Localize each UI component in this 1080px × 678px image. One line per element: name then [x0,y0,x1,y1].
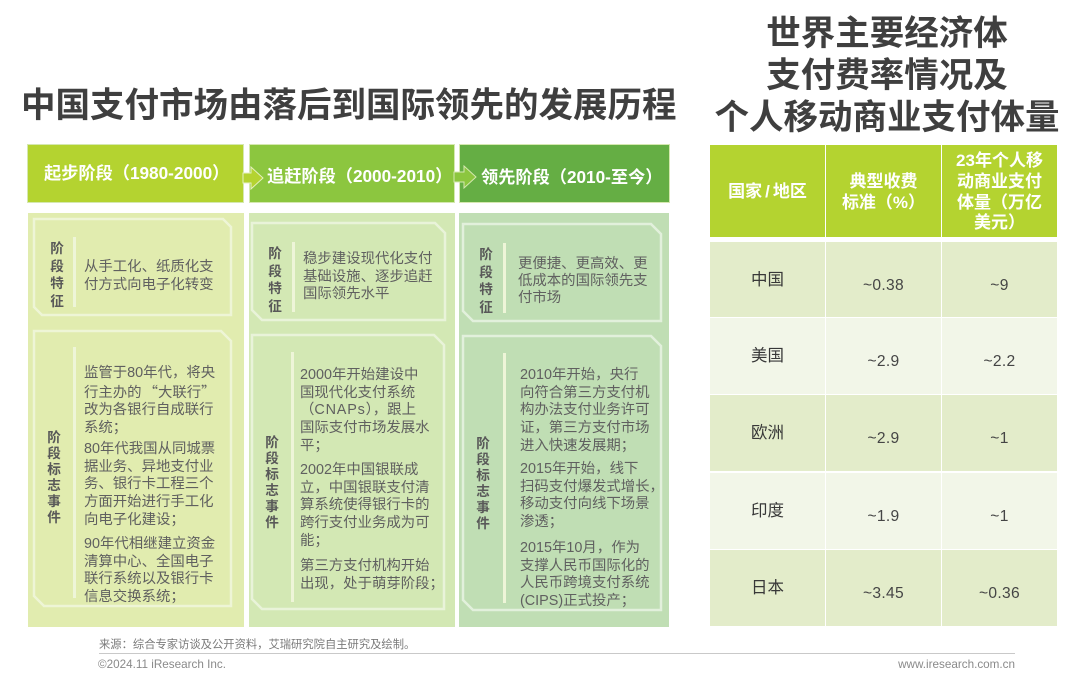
stage 3 event text: 进入快速发展期； [520,438,635,454]
copyright: ©2024.11 iResearch Inc. [98,658,226,671]
header: stage 2: 追赶阶段（2000-2010） [267,166,452,186]
stage 1 event text 2: 方面开始进行手工化 [84,494,214,510]
stage 2 event text: （CNAPs），跟上 [300,402,416,418]
table header: country [710,145,825,237]
panel: stage 2 body [249,213,455,627]
stage 2 event text: 国现代化支付系统 [300,385,415,401]
source note: 来源：综合专家访谈及公开资料，艾瑞研究院自主研究及绘制。 [99,639,415,651]
row: Japan: ~3.45 [863,584,904,602]
website: www.iresearch.com.cn [898,658,1015,671]
stage 3 event text 3: 支撑人民币国际化的 [520,558,650,574]
footer rule [99,653,1015,654]
divider [502,353,506,603]
table header: volume [942,145,1057,237]
stage 1 feature label: 阶段特征 [50,241,64,308]
arrow: stage 2 to 3 [454,165,477,189]
stage 2 feature text [303,250,433,302]
stage 1 event text: 改为各银行自成联行 [84,402,214,418]
arrow: stage 1 to 2 [242,166,264,190]
table header: volume: 美元） [974,213,1025,232]
stage 3 event text 3: 2015年10月，作为 [520,540,640,556]
row: Europe: ~1 [990,430,1009,446]
row: India: ~1 [990,508,1009,524]
header: stage 1 [27,144,244,203]
title: left heading: 中国支付市场由落后到国际领先的发展历程 [21,87,676,125]
stage 1 event text 3 [84,536,215,605]
stage 2 feature text: 国际领先水平 [303,286,389,302]
stage 1 event text 2: 80年代我国从同城票 [84,441,215,457]
stage 2 feature label: 阶段特征 [268,246,282,314]
stage 2 event text 2: 2002年中国银联成 [300,462,418,478]
stage 3 feature label: 阶段特征 [479,247,493,314]
stage 2 event text 2: 能； [300,533,329,549]
stage 1 event text 2 [84,440,215,528]
stage 3 event label: 阶段标志事件 [476,436,490,531]
header: stage 2 [249,144,455,203]
stage 3 feature text: 低成本的国际领先支 [518,273,648,289]
row: China: ~9 [990,276,1009,294]
row: China: ~0.38 [863,276,904,294]
header: stage 3: 领先阶段（2010-至今） [481,167,662,187]
title: right heading [714,15,1060,137]
stage 1 event text: 行主办的“大联行” [84,381,216,402]
stage 2 event text 2 [300,462,430,549]
table header: fee [826,145,941,237]
stage 1 feature text: 付方式向电子化转变 [84,276,214,292]
stage 3 event text 3 [520,540,650,609]
stage 1 event text 2: 向电子化建设； [84,512,185,528]
table: payment rates [710,145,1057,626]
stage 1 feature text: 从手工化、纸质化支 [84,259,214,275]
stage 1 event text [84,364,216,436]
stage 1 event text 3: 信息交换系统； [84,589,185,605]
title: right heading: 个人移动商业支付体量 [714,99,1060,137]
divider [502,243,506,313]
stage 1 event text: 系统； [84,420,127,436]
row: Japan [710,550,1057,626]
divider [292,242,294,312]
row: Japan: ~0.36 [979,584,1020,602]
stage 1 event text: 监管于80年代，将央 [84,365,215,381]
stage 3 event text 2 [520,460,664,530]
row: USA: ~2.9 [868,352,899,370]
table header: fee: 标准（%） [842,192,925,212]
stage 3 event text: 2010年开始，央行 [520,367,638,383]
stage 2 event text [300,366,430,454]
stage 1 event label: 阶段标志事件 [47,430,61,525]
table header: volume: 23年个人移 [956,151,1043,170]
stage 2 feature text: 稳步建设现代化支付 [303,251,433,267]
row: USA: ~2.2 [984,352,1015,370]
row: USA: 美国 [751,347,784,365]
table header: country: 国家 地区 [728,182,807,201]
divider [290,352,294,602]
stage 1 feature text [84,258,214,292]
row: Europe: ~2.9 [868,430,899,446]
table header: fee: 典型收费 [850,172,918,191]
row: China [710,242,1057,317]
stage 2 event text 2: 跨行支付业务成为可 [300,515,430,531]
row: USA [710,318,1057,394]
row: China: 中国 [751,271,784,289]
stage 3 feature text: 付市场 [518,290,561,306]
stage 3 event text: 证，第三方支付市场 [520,420,650,436]
stage 1 event text 3: 90年代相继建立资金 [84,536,215,552]
stage 3 feature text [518,256,648,306]
title: right heading: 支付费率情况及 [766,57,1008,95]
table header: volume: 体量（万亿 [957,192,1042,212]
stage 3 event text 3: 人民币跨境支付系统 [520,575,650,591]
row: India: 印度 [751,502,784,520]
stage 1 event text 2: 务、银行卡工程三个 [84,476,214,492]
stage 1 event text 3: 联行系统以及银行卡 [84,571,214,587]
header: stage 3 [459,144,670,203]
stage 3 event text: 构办法支付业务许可 [520,402,650,418]
row: Europe: 欧洲 [751,424,784,442]
stage 3 event text 2: 渗透； [520,514,563,530]
row: Japan: 日本 [751,579,784,597]
table header: volume: 动商业支付 [957,172,1042,191]
stage 3 event text: 向符合第三方支付机 [520,385,650,401]
stage 1 event text 2: 据业务、异地支付业 [84,459,214,475]
stage 3 event text 2: 2015年开始，线下 [520,461,638,477]
stage 3 event text 2: 扫码支付爆发式增长， [520,479,664,495]
divider [72,347,76,598]
row: India: ~1.9 [868,508,899,524]
stage 2 event text: 平； [300,438,329,454]
panel: stage 3 body [459,213,669,627]
row: Europe [710,395,1057,471]
title: right heading: 世界主要经济体 [766,15,1008,53]
stage 2 event text 2: 算系统使得银行卡的 [300,497,430,513]
stage 2 event text 3 [300,558,444,592]
stage 1 event text 3: 清算中心、全国电子 [84,554,214,570]
table header: country: / [765,182,770,201]
stage 2 event text 3: 第三方支付机构开始 [300,558,430,574]
stage 3 event text [520,366,650,454]
stage 2 event text: 2000年开始建设中 [300,367,418,383]
stage 2 event text: 国际支付市场发展水 [300,420,430,436]
divider [72,237,76,307]
header: stage 1: 起步阶段（1980-2000） [44,163,229,183]
stage 2 feature text: 基础设施、逐步追赶 [303,269,433,285]
stage 2 event text 2: 立，中国银联支付清 [300,480,430,496]
stage 2 event label: 阶段标志事件 [265,435,279,530]
stage 3 event text 3: (CIPS)正式投产； [520,593,635,609]
stage 2 event text 3: 出现，处于萌芽阶段； [300,576,444,592]
stage 3 feature text: 更便捷、更高效、更 [518,256,648,272]
panel: stage 1 body [28,213,244,627]
stage 3 event text 2: 移动支付向线下场景 [520,496,650,512]
row: India [710,473,1057,549]
